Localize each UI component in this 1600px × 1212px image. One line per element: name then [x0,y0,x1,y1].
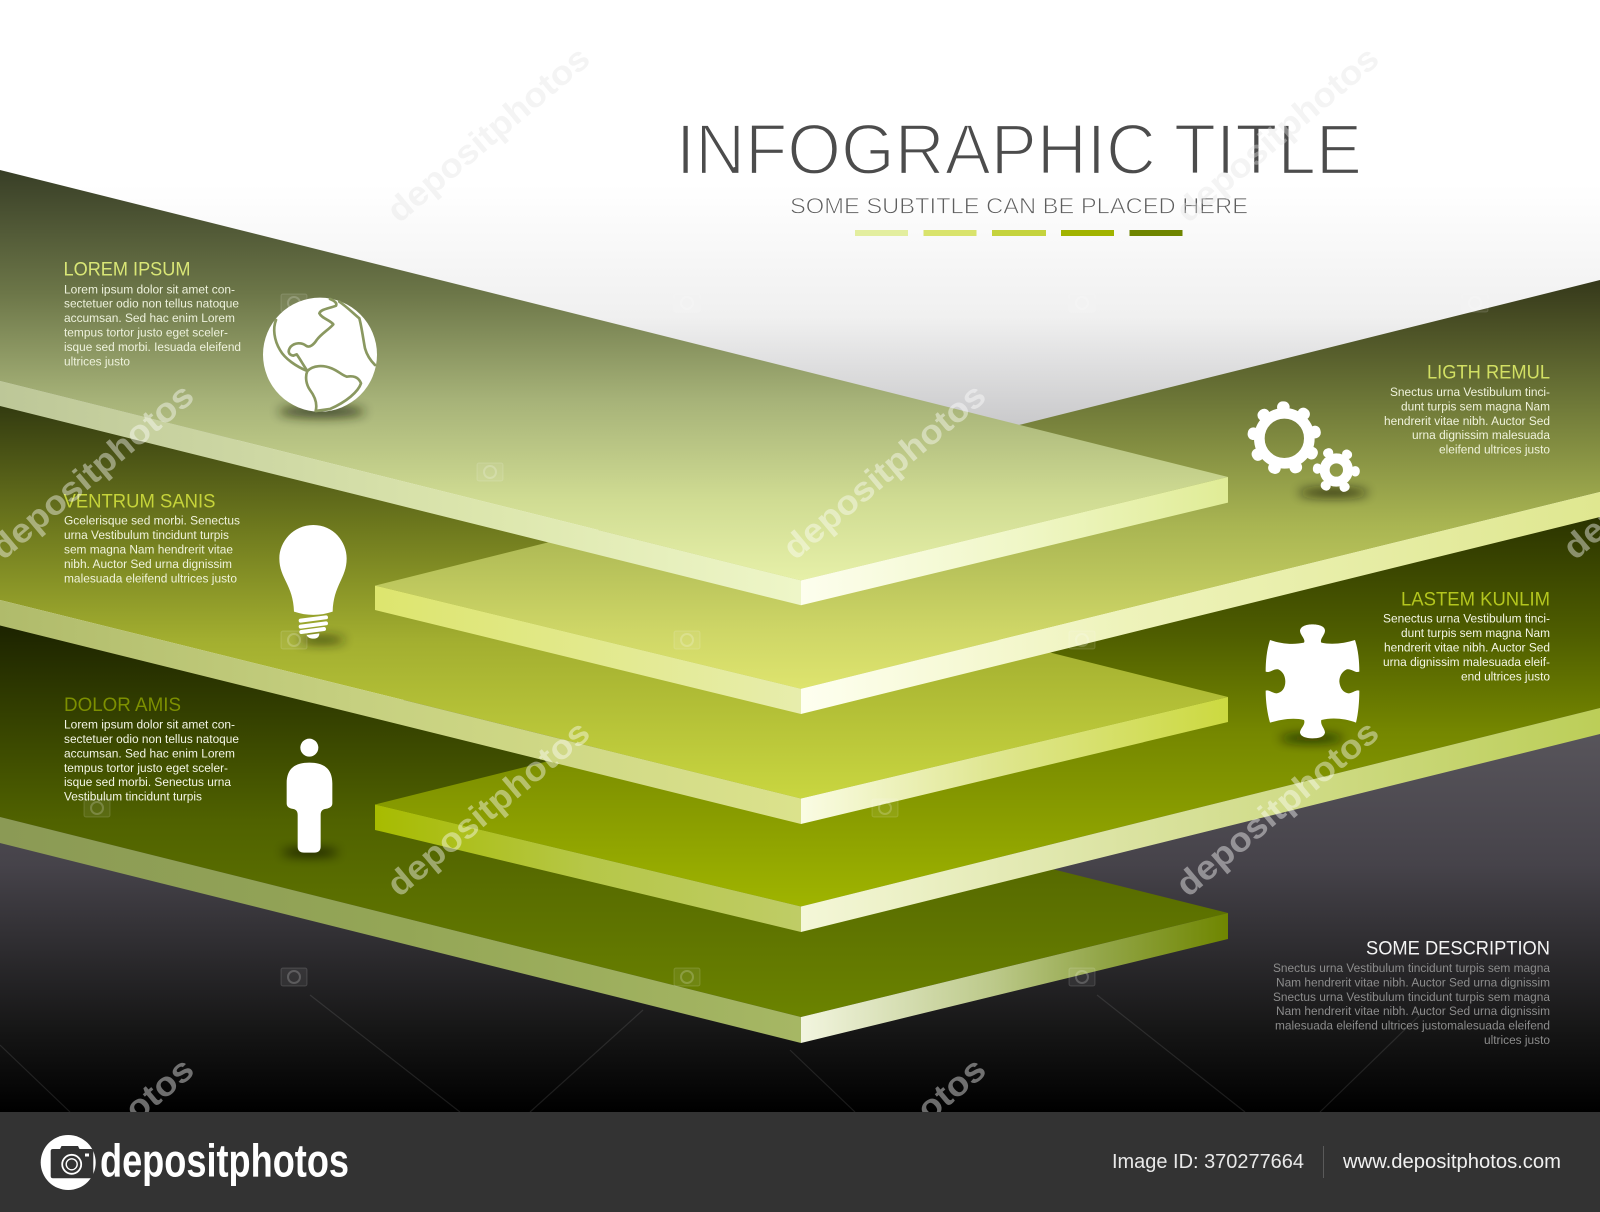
text block: lastem kunlim [1383,588,1550,683]
text block: dolor amis: DOLOR AMIS [64,694,181,716]
website: www.depositphotos.com [1342,1151,1561,1173]
text block: lorem ipsum: tempus tortor justo eget sceler- [64,326,228,340]
text block: ventrum sanis [64,490,240,585]
text block: lorem ipsum: Lorem ipsum dolor sit amet con- [64,282,235,296]
text block: ligth remul [1384,361,1550,457]
text block: dolor amis: accumsan. Sed hac enim Lorem [64,746,235,760]
text block: some description: Snectus urna Vestibulum tincidunt turpis sem magna [1273,990,1550,1004]
text block: lastem kunlim: dunt turpis sem magna Nam [1401,626,1550,640]
layer 1 (palest plate) [0,170,1228,605]
text block: dolor amis: sectetuer odio non tellus natoque [64,732,239,746]
layer 4 (green plate) [375,498,1600,932]
colour dashes [855,230,1182,236]
text block: some description: SOME DESCRIPTION [1366,937,1550,959]
text block: ventrum sanis: VENTRUM SANIS [64,490,216,512]
text block: ligth remul: Snectus urna Vestibulum tinci- [1390,385,1550,399]
text block: dolor amis: Vestibulum tincidunt turpis [64,790,202,804]
text block: lastem kunlim: hendrerit vitae nibh. Auctor Sed [1384,640,1550,654]
footer logo wordmark: depositphotos [100,1134,349,1186]
layer 5 (darkest green plate) [0,606,1228,1043]
text block: ventrum sanis: nibh. Auctor Sed urna dignissim [64,557,232,571]
text block: ligth remul: urna dignissim malesuada [1412,428,1550,442]
text block: ventrum sanis: sem magna Nam hendrerit vitae [64,542,233,556]
text block: some description: Snectus urna Vestibulum tincidunt turpis sem magna [1273,961,1550,975]
icon: person [282,739,338,856]
stock watermarks: depositphotos [1169,39,1386,230]
text block: dolor amis: isque sed morbi. Senectus urna [64,775,231,789]
stock watermarks: depositphotos [380,39,597,230]
large gear [1251,405,1317,471]
layer 3 (lime plate) [0,390,1228,824]
title: INFOGRAPHIC TITLE [676,111,1362,190]
text block: ventrum sanis: Gcelerisque sed morbi. Senectus [64,514,240,528]
text block: some description: malesuada eleifend ultrices justomalesuada eleifend [1275,1019,1550,1033]
text block: ligth remul: LIGTH REMUL [1427,361,1550,383]
text block: some description: Nam hendrerit vitae nibh. Auctor Sed urna dignissim [1276,1004,1550,1018]
text block: lorem ipsum [64,259,241,368]
text block: dolor amis: tempus tortor justo eget sceler- [64,761,228,775]
text block: ligth remul: hendrerit vitae nibh. Auctor Sed [1384,414,1550,428]
text block: lorem ipsum: accumsan. Sed hac enim Lorem [64,311,235,325]
stock watermarks: depositphotos [1169,713,1386,904]
footer bar [0,1112,1600,1212]
subtitle: SOME SUBTITLE CAN BE PLACED HERE [790,194,1248,218]
icon: globe [263,298,377,418]
text block: ventrum sanis: urna Vestibulum tincidunt turpis [64,528,229,542]
text block: lastem kunlim: LASTEM KUNLIM [1401,588,1550,610]
small gear [1317,450,1356,490]
text block: lorem ipsum: sectetuer odio non tellus natoque [64,297,239,311]
text block: lorem ipsum: ultrices justo [64,354,130,368]
text block: ligth remul: dunt turpis sem magna Nam [1401,399,1550,413]
text block: lastem kunlim: urna dignissim malesuada eleif- [1383,655,1550,669]
footer logo icon [41,1135,96,1190]
title block [676,111,1362,236]
text block: some description: ultrices justo [1484,1033,1550,1047]
icon: gears [1251,405,1368,497]
text block: dolor amis [64,694,239,804]
text block: ventrum sanis: malesuada eleifend ultrices justo [64,571,237,585]
text block: some description [1273,937,1550,1047]
text block: lastem kunlim: end ultrices justo [1461,669,1550,683]
icon: puzzle piece [1266,624,1359,742]
image id: Image ID: 370277664 [1112,1151,1304,1173]
icon: light bulb [279,525,347,643]
text block: lorem ipsum: LOREM IPSUM [64,259,190,281]
text block: lastem kunlim: Senectus urna Vestibulum tinci- [1383,612,1550,626]
text block: ligth remul: eleifend ultrices justo [1439,443,1550,457]
text block: lorem ipsum: isque sed morbi. Iesuada eleifend [64,340,241,354]
layer 2 (light lime plate) [375,280,1600,714]
text block: dolor amis: Lorem ipsum dolor sit amet con- [64,718,235,732]
text block: some description: Nam hendrerit vitae nibh. Auctor Sed urna dignissim [1276,975,1550,989]
stock watermarks: depositphotos [776,376,993,567]
stock watermarks: depositphotos [380,713,597,904]
